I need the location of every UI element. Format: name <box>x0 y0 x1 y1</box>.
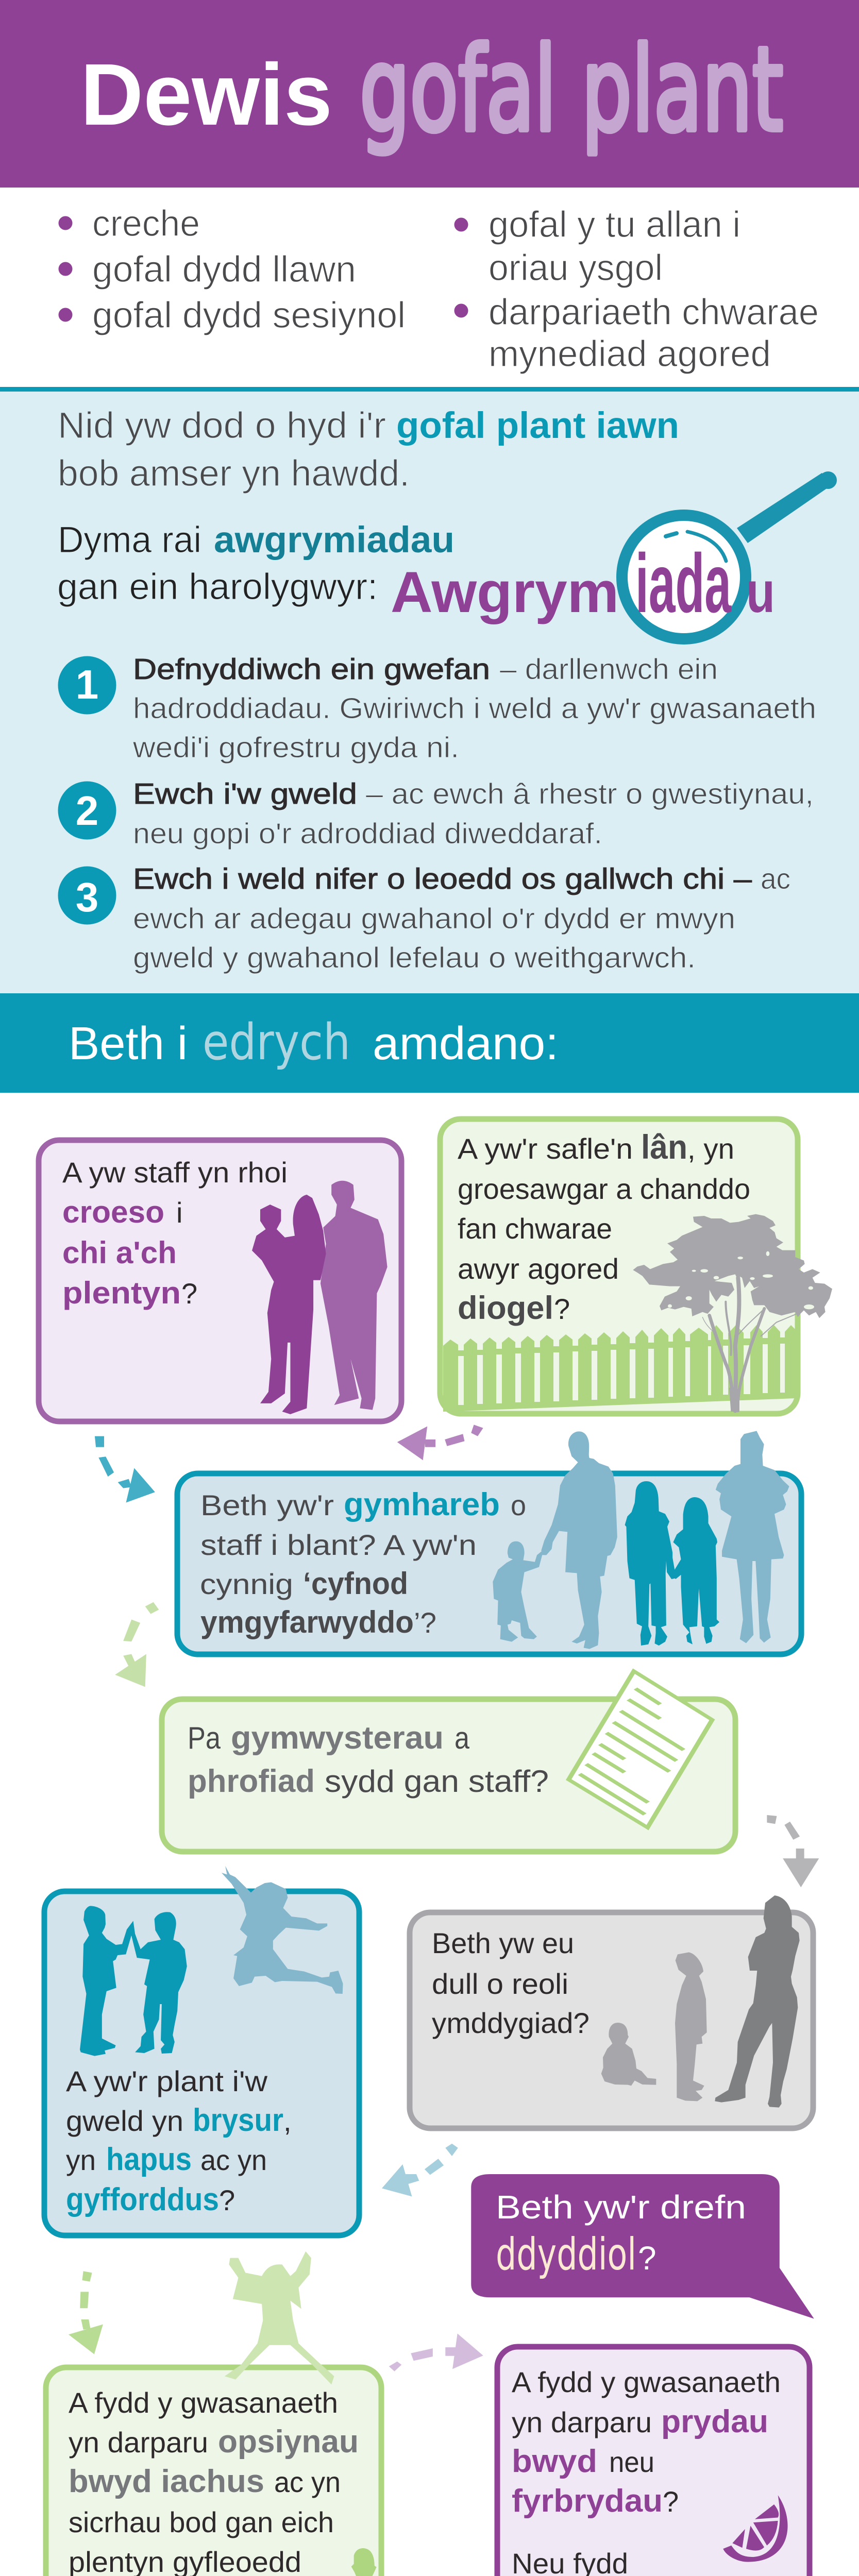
card text: chi a'ch <box>62 1235 177 1270</box>
tips intro text: awgrymiadau <box>214 520 454 561</box>
card text: ‘cyfnod <box>303 1566 408 1601</box>
panel: tips background <box>0 387 859 993</box>
tip 1: Defnyddiwch ein gwefan <box>133 653 490 686</box>
icon: magnifying glass over word Awgrymiadau: u <box>746 560 775 624</box>
card text: croeso <box>62 1195 164 1229</box>
illustration: tree <box>633 1214 832 1412</box>
card text: A yw'r plant i'w <box>66 2065 268 2097</box>
card text: i <box>176 1196 182 1229</box>
card text: cynnig <box>200 1568 293 1600</box>
card text: yn darparu <box>69 2426 208 2459</box>
tip 1: wedi'i gofrestru gyda ni. <box>132 731 459 764</box>
card text: lân <box>641 1128 687 1166</box>
card text: ac yn <box>200 2144 267 2176</box>
card text: fyrbrydau <box>512 2483 663 2519</box>
tip 3: ewch ar adegau gwahanol o'r dydd er mwyn <box>133 902 735 935</box>
section heading band: amdano: <box>373 1018 559 1070</box>
card text: plentyn <box>62 1276 181 1310</box>
card text: fan chwarae <box>458 1212 612 1245</box>
header panel: title <box>0 0 859 188</box>
card text: diogel <box>458 1290 553 1326</box>
card text: staff i blant? A yw'n <box>200 1529 477 1561</box>
icon: magnifying glass over word Awgrymiadau <box>391 471 837 639</box>
card text <box>200 1487 526 1639</box>
card text: yn darparu <box>512 2406 652 2438</box>
silhouette: family with child <box>252 1181 388 1414</box>
card text: Beth yw'r <box>200 1489 334 1521</box>
icon: citrus slice <box>723 2495 788 2562</box>
card text: neu <box>609 2446 654 2478</box>
card text: gyfforddus <box>66 2182 219 2217</box>
intro text <box>58 405 679 494</box>
panel: childcare types list <box>0 188 859 387</box>
card text: opsiynau <box>218 2424 359 2460</box>
header panel: title: Dewis <box>80 46 332 144</box>
tip 2 <box>58 777 814 850</box>
card text: bwyd iachus <box>69 2464 264 2499</box>
arrow: grey dashed <box>767 1815 819 1887</box>
section heading band: Beth i <box>69 1018 188 1070</box>
icon: certificate paper <box>568 1671 712 1827</box>
speech bubble: daily routine: ddyddiol <box>496 2229 636 2280</box>
card text: ac yn <box>274 2466 341 2498</box>
card text <box>66 2065 292 2217</box>
card text: ymddygiad? <box>432 2007 589 2039</box>
illustration: picket fence <box>443 1325 796 1412</box>
arrow: light blue dashed <box>382 2144 458 2196</box>
tip 2: Ewch i'w gweld <box>133 777 357 810</box>
tip 3: gweld y gwahanol lefelau o weithgarwch. <box>133 941 696 974</box>
tip 1: 1 <box>76 662 98 707</box>
speech bubble: daily routine: Beth yw'r drefn <box>496 2189 746 2226</box>
tips intro text: gan ein harolygwyr: <box>57 567 378 607</box>
card text <box>432 1927 589 2039</box>
silhouette: jumping girl <box>225 2251 334 2384</box>
panel: childcare types list: gofal dydd llawn <box>92 249 356 290</box>
silhouette: child with bicycle <box>295 2548 427 2576</box>
section heading band: edrych <box>203 1013 350 1071</box>
card text: phrofiad <box>188 1764 315 1799</box>
card text: Beth yw eu <box>432 1927 574 1959</box>
arrow: teal dashed <box>95 1436 155 1503</box>
speech bubble: daily routine: ? <box>638 2240 656 2277</box>
icon: magnifying glass over word Awgrymiadau: iada <box>635 537 732 630</box>
panel: behaviour card <box>410 1895 813 2128</box>
arrow: green dashed down <box>69 2271 103 2354</box>
silhouette: staff and children <box>493 1431 789 1649</box>
tip 3: 3 <box>76 874 98 920</box>
intro text: gofal plant iawn <box>396 405 679 446</box>
card text: ? <box>663 2485 679 2518</box>
card text <box>458 1128 750 1326</box>
card text: , <box>283 2105 292 2137</box>
intro text: bob amser yn hawdd. <box>58 453 410 494</box>
tip 1: – darllenwch ein <box>500 653 718 686</box>
card text: ? <box>219 2184 235 2216</box>
panel: clean safe site card <box>440 1119 832 1414</box>
card text <box>62 1156 288 1310</box>
card text: A fydd y gwasanaeth <box>69 2386 338 2419</box>
panel: staff ratio card <box>177 1431 801 1654</box>
silhouette: adult and children <box>601 1895 800 2108</box>
tip 1: hadroddiadau. Gwiriwch i weld a yw'r gwasanaeth <box>133 692 816 725</box>
panel: childcare types list: mynediad agored <box>489 334 771 375</box>
card text: gweld yn <box>66 2105 183 2137</box>
card text: a <box>454 1721 470 1755</box>
card text: prydau <box>661 2404 768 2439</box>
arrow: light purple dashed <box>389 2333 483 2371</box>
card text: ymgyfarwyddo <box>200 1605 414 1639</box>
tips intro text <box>57 520 454 607</box>
card text: A yw'r safle'n <box>458 1132 633 1165</box>
card text <box>512 2366 781 2576</box>
panel: children busy happy card <box>44 1866 359 2235</box>
card text: bwyd <box>512 2444 597 2479</box>
card text: A yw staff yn rhoi <box>62 1156 288 1189</box>
card text: gymhareb <box>344 1487 500 1522</box>
panel: childcare types list: gofal y tu allan i <box>489 205 740 245</box>
tip 3: Ewch i weld nifer o leoedd os gallwch chi – <box>133 862 752 895</box>
card text: ? <box>554 1293 570 1325</box>
card text: ’? <box>414 1606 436 1639</box>
card text: groesawgar a chanddo <box>458 1173 750 1205</box>
panel: healthy food and exercise card <box>46 2367 427 2576</box>
panel: childcare types list: gofal dydd sesiynol <box>92 295 406 336</box>
tip 2: neu gopi o'r adroddiad diweddaraf. <box>133 817 602 850</box>
arrow: purple dashed <box>397 1425 483 1460</box>
card text: Pa <box>188 1721 221 1755</box>
card text: gymwysterau <box>231 1720 444 1756</box>
panel: welcome card <box>39 1140 401 1421</box>
card text: , yn <box>687 1132 734 1165</box>
arrow: green dashed <box>115 1602 159 1687</box>
panel: qualifications card <box>162 1671 735 1852</box>
card text: o <box>511 1489 526 1521</box>
tip 3: ac <box>761 862 790 895</box>
tip 2: 2 <box>76 788 98 834</box>
card text: awyr agored <box>458 1252 619 1285</box>
card text: ? <box>181 1277 197 1310</box>
tip 2: – ac ewch â rhestr o gwestiynau, <box>366 777 814 810</box>
card text: yn <box>66 2144 96 2176</box>
card text: dull o reoli <box>432 1968 568 2000</box>
card text: hapus <box>106 2142 192 2177</box>
card text <box>188 1720 549 1799</box>
card text <box>69 2386 359 2576</box>
panel: childcare types list: oriau ysgol <box>489 248 663 289</box>
intro text: Nid yw dod o hyd i'r <box>58 405 386 446</box>
card text: sicrhau bod gan eich <box>69 2506 334 2538</box>
panel: childcare types list: darpariaeth chwarae <box>489 292 819 333</box>
section heading band <box>0 993 859 1093</box>
panel: meals card <box>497 2347 810 2576</box>
silhouette: children high five and jumping <box>80 1866 343 2056</box>
tip 1 <box>58 653 816 764</box>
panel: childcare types list: creche <box>92 204 200 244</box>
tip 3 <box>58 862 790 974</box>
card text: sydd gan staff? <box>325 1764 549 1799</box>
icon: magnifying glass over word Awgrymiadau: Awgrym <box>391 560 619 624</box>
speech bubble: daily routine <box>471 2174 814 2319</box>
card text: A fydd y gwasanaeth <box>512 2366 781 2398</box>
tips intro text: Dyma rai <box>58 520 201 561</box>
card text: brysur <box>193 2103 283 2138</box>
